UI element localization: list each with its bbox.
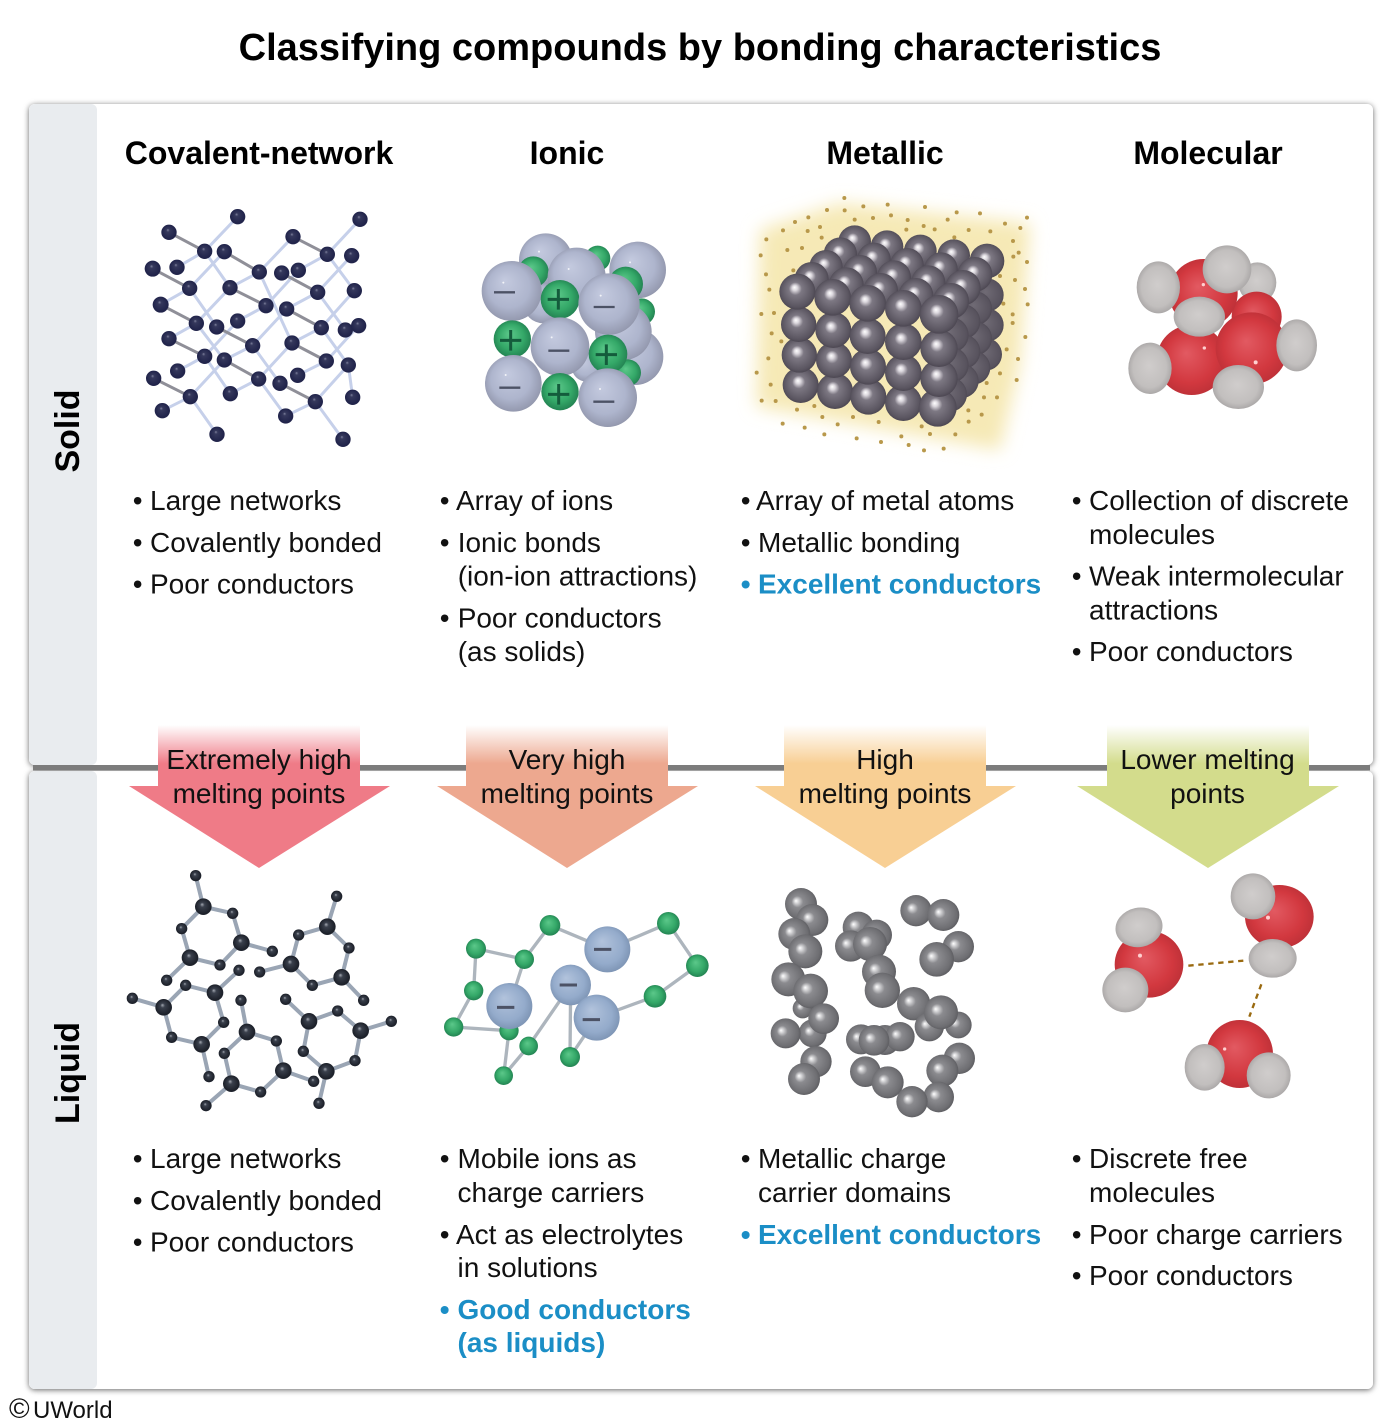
arrow: molecular melting points — [1077, 725, 1339, 868]
list: liquid molecular: Poor charge carriers — [1089, 1219, 1343, 1250]
list: solid covalent-network: • — [133, 568, 143, 600]
list: solid covalent-network: Poor conductors — [150, 568, 354, 600]
column headings: Covalent-network — [125, 135, 393, 171]
list: solid molecular: Weak intermolecular — [1089, 560, 1344, 592]
list: liquid metallic: carrier domains — [758, 1177, 951, 1208]
list: solid molecular: attractions — [1089, 594, 1218, 626]
arrow: molecular melting points: Lower melting — [1120, 744, 1295, 775]
list: solid metallic: Excellent conductors — [758, 568, 1041, 600]
list: solid molecular — [1072, 485, 1349, 667]
list: solid ionic — [440, 485, 697, 667]
list: liquid molecular — [1072, 1143, 1343, 1291]
list: liquid covalent-network: Covalently bonded — [150, 1185, 382, 1216]
list: liquid ionic: in solutions — [458, 1252, 598, 1283]
list: solid molecular: Collection of discrete — [1089, 485, 1349, 516]
illustration: solid ionic lattice — [482, 233, 666, 427]
illustration: liquid ionic — [444, 912, 709, 1085]
list: liquid ionic: • — [440, 1219, 450, 1250]
row label: liquid: Liquid — [49, 1022, 87, 1124]
list: liquid ionic: Mobile ions as — [458, 1143, 636, 1174]
illustration: solid water molecules — [1128, 245, 1317, 409]
list: liquid ionic: • — [440, 1143, 450, 1174]
list: liquid covalent-network: • — [133, 1143, 143, 1174]
list: liquid ionic: (as liquids) — [458, 1327, 605, 1358]
list: liquid molecular: Discrete free — [1089, 1143, 1248, 1174]
list: solid molecular: Poor conductors — [1089, 636, 1293, 667]
list: liquid covalent-network: Large networks — [150, 1143, 341, 1174]
list: solid ionic: • — [440, 602, 450, 634]
list: solid covalent-network — [133, 485, 382, 600]
column headings — [125, 135, 1283, 171]
list: liquid metallic: • — [741, 1219, 751, 1250]
list: solid ionic: Ionic bonds — [458, 527, 601, 558]
list: solid covalent-network: Covalently bonded — [150, 527, 382, 558]
list: solid covalent-network: • — [133, 485, 143, 516]
arrow: ionic melting points: melting points — [481, 778, 653, 809]
list: solid covalent-network: Large networks — [150, 485, 341, 516]
list: solid ionic: (ion-ion attractions) — [458, 560, 697, 592]
list: solid metallic: Array of metal atoms — [756, 485, 1014, 516]
arrow: covalent-network melting points: Extremely high — [166, 744, 352, 775]
illustration: liquid covalent network — [127, 870, 397, 1111]
list: solid metallic — [741, 485, 1041, 600]
arrow: covalent-network melting points: melting points — [173, 778, 345, 809]
list: solid ionic: Array of ions — [456, 485, 613, 516]
list: liquid covalent-network: • — [133, 1185, 143, 1216]
arrow: ionic melting points — [437, 725, 698, 868]
list: liquid covalent-network — [133, 1143, 382, 1258]
list: liquid molecular: • — [1072, 1219, 1082, 1250]
list: solid metallic: • — [741, 527, 751, 558]
panel: solid — [29, 104, 1373, 765]
list: solid molecular: • — [1072, 636, 1082, 667]
list: liquid metallic: Excellent conductors — [758, 1219, 1041, 1250]
list: solid ionic: (as solids) — [458, 636, 585, 667]
illustration: solid metallic lattice with electron sea — [755, 196, 1030, 452]
list: liquid metallic: • — [741, 1143, 751, 1174]
list: liquid ionic: • — [440, 1294, 450, 1325]
arrow: covalent-network melting points — [129, 725, 390, 868]
row label: solid: Solid — [49, 389, 87, 473]
column headings: Ionic — [530, 135, 604, 171]
list: solid metallic: Metallic bonding — [758, 527, 960, 558]
list: solid covalent-network: • — [133, 527, 143, 558]
list: liquid ionic: Act as electrolytes — [456, 1219, 683, 1250]
list: liquid ionic: Good conductors — [458, 1294, 691, 1325]
list: solid molecular: • — [1072, 560, 1082, 592]
list: liquid molecular: • — [1072, 1143, 1082, 1174]
illustration: liquid metallic clusters — [771, 888, 975, 1117]
list: liquid ionic — [440, 1143, 691, 1358]
list: solid molecular: molecules — [1089, 519, 1215, 550]
list: solid metallic: • — [741, 485, 751, 516]
list: liquid covalent-network: • — [133, 1226, 143, 1258]
arrow: metallic melting points: High — [856, 744, 914, 775]
arrow: metallic melting points — [755, 725, 1016, 868]
list: liquid ionic: charge carriers — [458, 1177, 644, 1208]
arrow: metallic melting points: melting points — [799, 778, 971, 809]
copyright: © — [9, 1393, 30, 1424]
copyright: UWorld — [33, 1397, 113, 1424]
list: liquid covalent-network: Poor conductors — [150, 1226, 354, 1258]
list: solid metallic: • — [741, 568, 751, 600]
list: solid molecular: • — [1072, 485, 1082, 516]
list: solid ionic: • — [440, 485, 450, 516]
arrow: ionic melting points: Very high — [509, 744, 625, 775]
list: liquid molecular: molecules — [1089, 1177, 1215, 1208]
title: Classifying compounds by bonding characteristics — [239, 27, 1161, 69]
panel: liquid — [29, 771, 1373, 1389]
arrow: molecular melting points: points — [1170, 778, 1245, 809]
illustration: solid covalent network — [145, 209, 368, 447]
list: liquid molecular: • — [1072, 1260, 1082, 1291]
list: liquid molecular: Poor conductors — [1089, 1260, 1293, 1291]
column headings: Molecular — [1133, 135, 1283, 171]
column headings: Metallic — [826, 135, 944, 171]
illustration: liquid water molecules — [1102, 873, 1314, 1098]
list: liquid metallic — [741, 1143, 1041, 1250]
list: liquid metallic: Metallic charge — [758, 1143, 946, 1174]
list: solid ionic: • — [440, 527, 450, 558]
list: solid ionic: Poor conductors — [458, 602, 662, 634]
